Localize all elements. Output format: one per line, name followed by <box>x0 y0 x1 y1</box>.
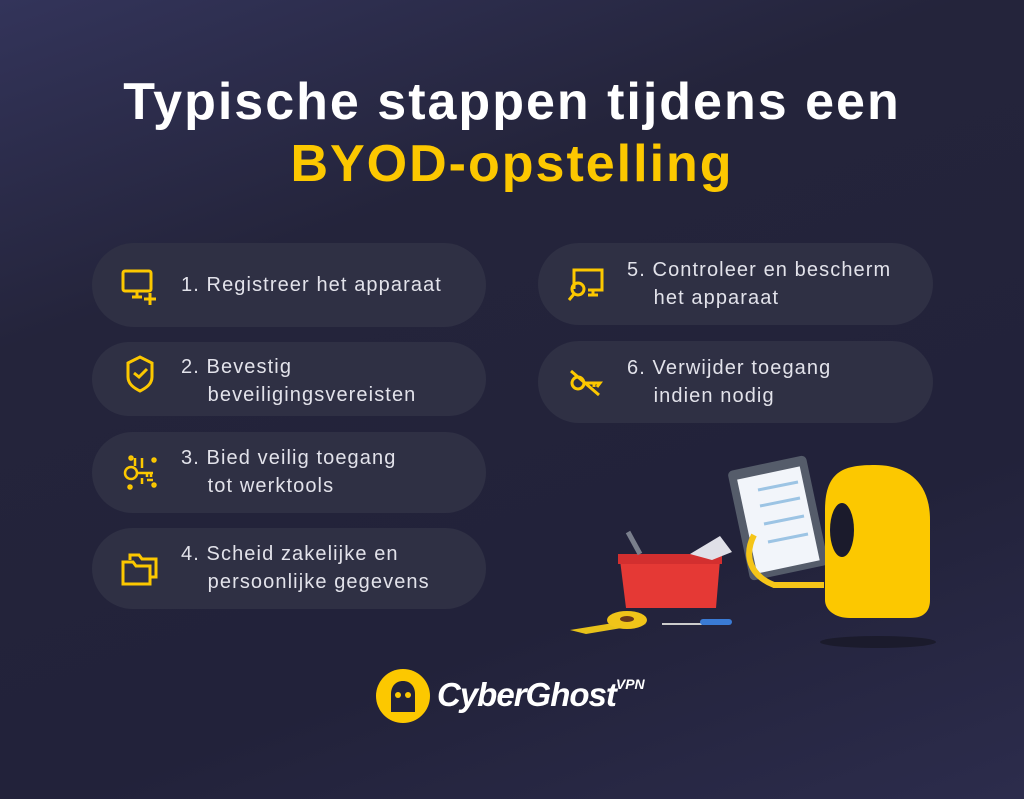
text: step 2 <box>181 356 416 406</box>
title: Typische stappen tijdens een <box>123 73 901 131</box>
text: step 2: 2. Bevestig <box>181 356 292 378</box>
icon: key circuit <box>124 455 157 490</box>
illustration: ghost with clipboard and toolbox <box>570 456 936 648</box>
icon: shield <box>126 355 154 393</box>
logo <box>376 669 645 723</box>
icon: key crossed <box>570 370 603 396</box>
text: step 6: indien nodig <box>654 385 775 407</box>
panel: step 5 <box>538 243 933 325</box>
text: step 6 <box>627 357 831 407</box>
icon: monitor search <box>568 268 604 301</box>
text: step 4 <box>181 543 430 593</box>
text: step 5 <box>627 259 891 309</box>
icon: monitor plus <box>122 270 156 305</box>
panel: step 4 <box>92 528 486 609</box>
text: step 3: tot werktools <box>208 475 334 497</box>
text: step 4: 4. Scheid zakelijke en <box>181 543 399 565</box>
title: BYOD-opstelling <box>290 135 734 193</box>
text: step 1: 1. Registreer het apparaat <box>181 274 442 296</box>
panel: step 1 <box>92 243 486 327</box>
text: step 3: 3. Bied veilig toegang <box>181 447 396 469</box>
text: step 5: 5. Controleer en bescherm <box>627 259 891 281</box>
text: step 4: persoonlijke gegevens <box>208 571 430 593</box>
icon: ghost logo <box>376 669 430 723</box>
text: step 2: beveiligingsvereisten <box>208 384 416 406</box>
title <box>123 73 901 193</box>
icon: folders <box>122 554 158 586</box>
text: step 3 <box>181 447 396 497</box>
text: logo: CyberGhostVPN <box>437 676 645 713</box>
panel: step 2 <box>92 342 486 416</box>
text: step 5: het apparaat <box>654 287 779 309</box>
text: step 6: 6. Verwijder toegang <box>627 357 831 379</box>
panel: step 3 <box>92 432 486 513</box>
panel: step 6 <box>538 341 933 423</box>
